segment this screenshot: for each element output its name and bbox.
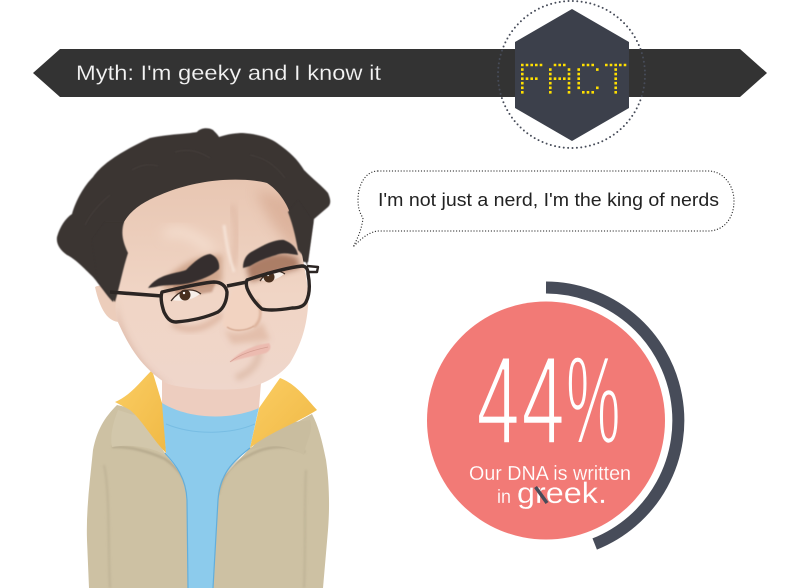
banner heading: Myth: I'm geeky and I know it [76,62,381,85]
t-shirt [161,402,259,588]
face [116,180,308,390]
statistic circle [427,302,665,540]
percentage figure: 4 [476,332,520,471]
statistic ring [546,288,678,544]
percentage figure: % [566,330,620,470]
percentage figure: 4 [522,332,565,471]
left eye [171,290,201,301]
speech bubble [353,171,734,247]
statistic caption [469,463,631,510]
left eyebrow [148,254,219,288]
percentage figure [476,330,620,471]
hair strands [85,150,285,225]
face shading [116,190,304,386]
hair back [57,128,330,302]
character illustration [57,128,330,588]
fact badge [498,1,645,148]
banner ribbon [33,49,767,97]
right eyebrow [243,240,298,268]
statistic caption: Our DNA is written [469,463,631,485]
mouth [230,343,270,362]
neck [162,370,262,416]
speech text: I'm not just a nerd, I'm the king of nerds [378,190,719,210]
glasses [110,266,318,322]
strike through r [536,487,547,503]
hair sides over face [92,200,313,302]
statistic caption: in [497,487,511,508]
jacket [87,405,329,588]
nose [222,284,270,344]
ear [95,285,120,322]
statistic caption: greek. [517,477,607,510]
right eye [260,271,285,282]
yellow collar [115,370,317,453]
